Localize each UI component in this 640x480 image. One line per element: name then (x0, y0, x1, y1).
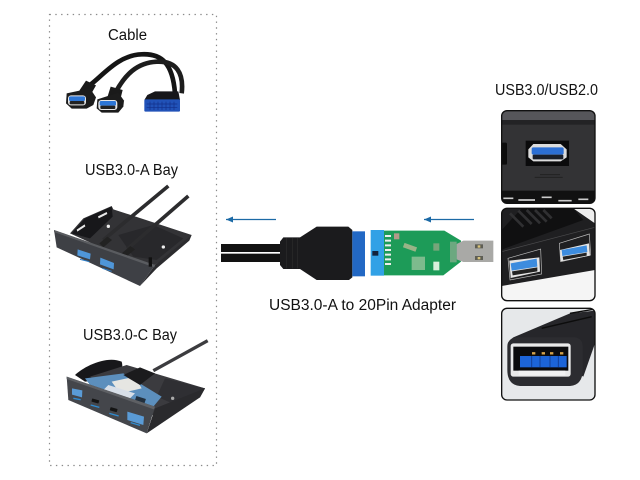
image: two USB ports on bay (502, 208, 595, 301)
panel: product options (50, 14, 216, 466)
image: USB socket close-up (502, 308, 595, 400)
arrow: from USB port (424, 216, 474, 222)
heading: USB3.0/USB2.0: USB3.0/USB2.0 (495, 82, 598, 99)
image: USB3.0-A bay (54, 186, 192, 286)
heading: USB3.0-A Bay: USB3.0-A Bay (85, 162, 178, 179)
heading: Cable: Cable (108, 27, 147, 44)
image: USB port close-up on panel (502, 111, 595, 203)
image: cable (66, 54, 182, 113)
blue 20-pin header (352, 231, 365, 276)
heading: USB3.0-C Bay: USB3.0-C Bay (83, 327, 177, 344)
black connector housing (280, 227, 352, 280)
arrow: to bay options (226, 216, 276, 222)
twin cable (221, 244, 281, 262)
image: USB3.0-C bay (67, 341, 208, 433)
USB-A plug (457, 241, 493, 262)
image: adapter and cable (221, 227, 493, 280)
caption: adapter: USB3.0-A to 20Pin Adapter (269, 297, 456, 314)
green circuit board (384, 231, 461, 275)
blue socket (371, 230, 384, 276)
